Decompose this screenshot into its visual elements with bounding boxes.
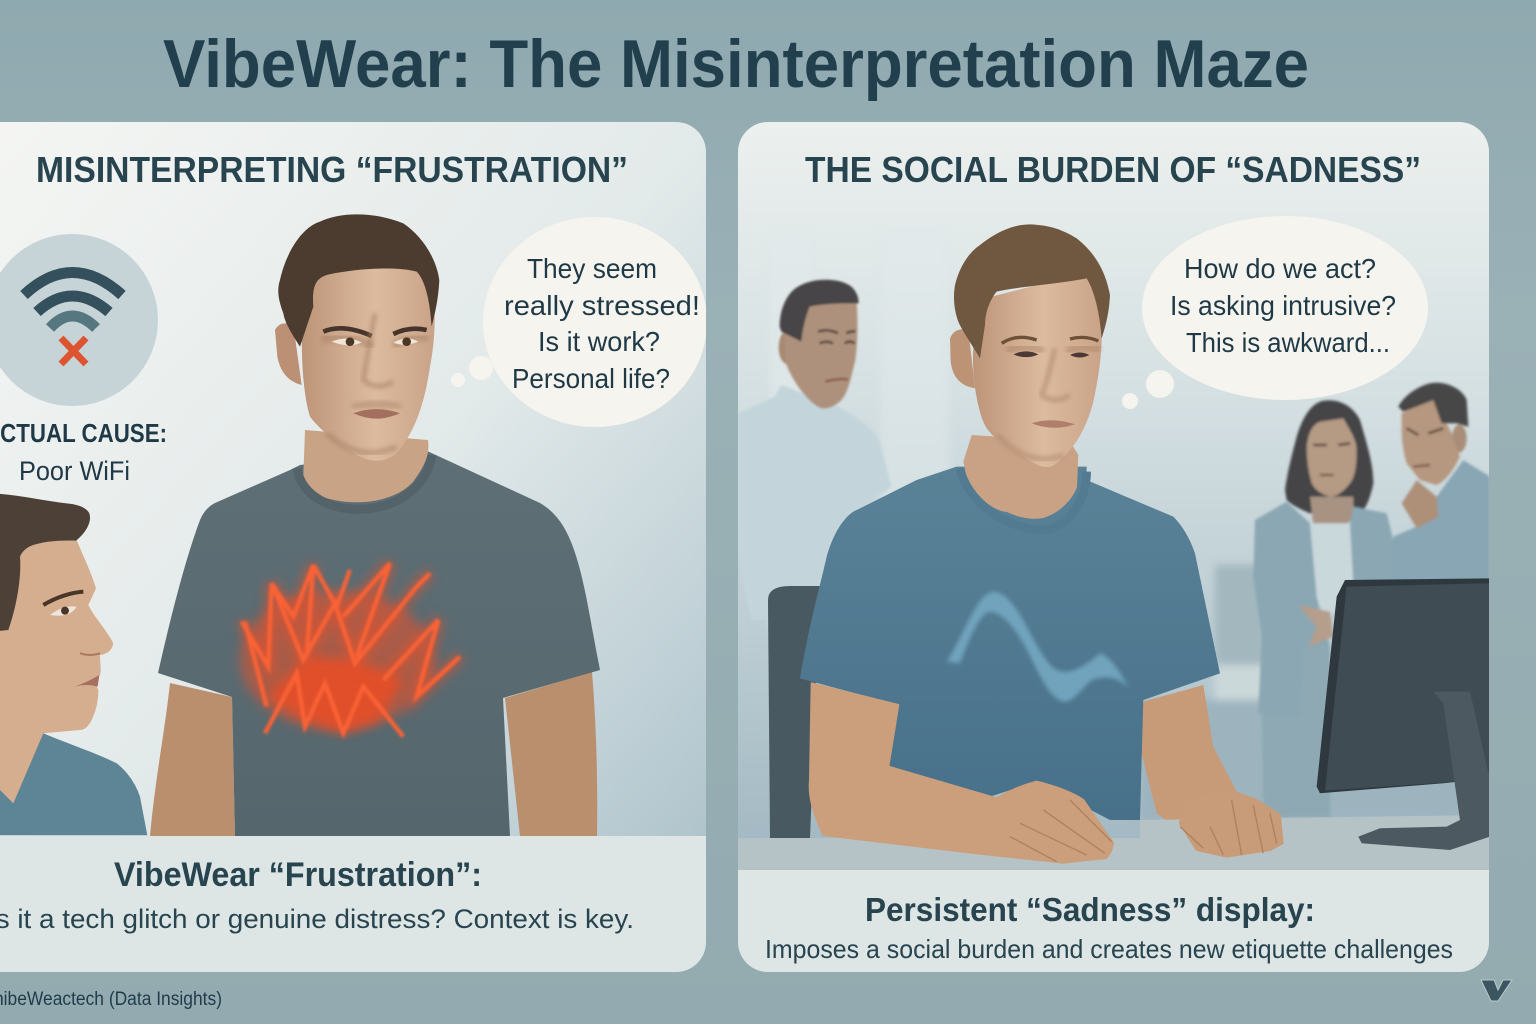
sad man neck: [963, 435, 1078, 519]
onlooker shirt: [0, 733, 147, 835]
sad man ear: [950, 329, 975, 388]
woman arms: [1298, 605, 1333, 647]
coworkers: [1253, 383, 1490, 817]
monitor back: [1325, 583, 1490, 791]
sad man t-shirt: [800, 467, 1220, 820]
sad man right arm: [1140, 685, 1237, 850]
thought bubble: frustration: Is it work?: [538, 326, 660, 357]
caption: sadness: Persistent “Sadness” display:: [865, 891, 1315, 928]
monitor rim: [1317, 578, 1490, 793]
sad man face: [973, 272, 1102, 467]
background man hair: [780, 280, 859, 342]
right hand: [1180, 792, 1283, 857]
woman neck: [1310, 497, 1353, 525]
background man: [738, 280, 891, 620]
man on right hair: [1398, 383, 1468, 427]
man neck: [303, 430, 428, 502]
man on right ear: [1452, 424, 1467, 452]
caption: frustration: [0, 836, 706, 972]
heading: frustration panel: MISINTERPRETING “FRUSTRATION”: [36, 149, 628, 190]
monitor stand: [1358, 692, 1490, 850]
thought bubble: sadness: This is awkward...: [1186, 327, 1390, 358]
thought bubble: frustration: really stressed!: [504, 290, 700, 321]
onlooker neck and face: [0, 523, 113, 803]
desk: [738, 815, 1489, 880]
man right arm: [505, 672, 597, 836]
man features: [322, 313, 428, 453]
text: actual cause: Poor WiFi: [19, 456, 130, 486]
background man features: [818, 330, 855, 382]
woman face: [1307, 418, 1357, 497]
woman cardigan: [1253, 502, 1394, 717]
caption: sadness: Imposes a social burden and creates new etiquette challenges: [765, 934, 1453, 964]
man on right face: [1402, 397, 1460, 485]
coworker features: [1313, 428, 1443, 475]
knuckle lines: [1010, 800, 1277, 862]
sad man head: [950, 224, 1110, 530]
heading: sadness panel: THE SOCIAL BURDEN OF “SADNESS”: [805, 149, 1421, 190]
icon: wifi failure: [0, 234, 158, 406]
woman hair: [1285, 400, 1373, 513]
caption: frustration: Is it a tech glitch or genuine distress? Context is key.: [0, 904, 634, 934]
sad man collar: [960, 468, 1087, 530]
man face: [302, 260, 435, 461]
panel: social burden of sadness: [738, 122, 1490, 972]
background man face: [785, 297, 857, 409]
panel: misinterpreting frustration: [0, 122, 707, 972]
background man ear: [779, 331, 796, 364]
monitor: [1317, 578, 1490, 850]
thought bubble: sadness: How do we act?: [1184, 253, 1376, 284]
man ear: [275, 323, 302, 385]
man on right shirt: [1390, 460, 1490, 583]
man hair: [278, 214, 439, 347]
thought bubble: sadness: Is asking intrusive?: [1170, 290, 1396, 321]
thought bubble: sadness: [1122, 216, 1428, 409]
logo mark: [1481, 980, 1512, 1001]
thought bubble: frustration: [451, 217, 707, 427]
text: actual cause: [1, 424, 165, 480]
shirt wave glow: [947, 592, 1128, 702]
thought bubble: frustration: Personal life?: [512, 363, 670, 394]
title: VibeWear: The Misinterpretation Maze: [163, 26, 1309, 102]
caption: frustration: VibeWear “Frustration”:: [114, 856, 482, 894]
onlooker features: [43, 592, 100, 687]
chair: [768, 586, 820, 838]
man on right hand: [1402, 480, 1438, 528]
thought bubble: frustration: They seem: [527, 253, 657, 284]
office backdrop: [794, 387, 1459, 816]
onlooker hair: [0, 493, 90, 632]
caption: sadness: [738, 870, 1489, 972]
woman blouse: [1312, 522, 1352, 614]
left arm and hand: [810, 683, 1113, 863]
hands: [810, 683, 1283, 863]
background man shirt: [738, 385, 891, 620]
shirt burst glow: [240, 563, 460, 737]
man head: [275, 214, 439, 461]
sad man: [800, 224, 1237, 850]
frustrated man: [150, 214, 600, 836]
woman pants: [1262, 647, 1330, 817]
shirt collar: [297, 455, 432, 509]
sad man features: [997, 337, 1100, 459]
man t-shirt: [158, 450, 600, 836]
footer credit: nibeWeactech (Data Insights): [0, 989, 222, 1010]
sad man hair: [954, 224, 1110, 358]
man left arm: [150, 683, 235, 836]
onlooker man: [0, 493, 147, 835]
